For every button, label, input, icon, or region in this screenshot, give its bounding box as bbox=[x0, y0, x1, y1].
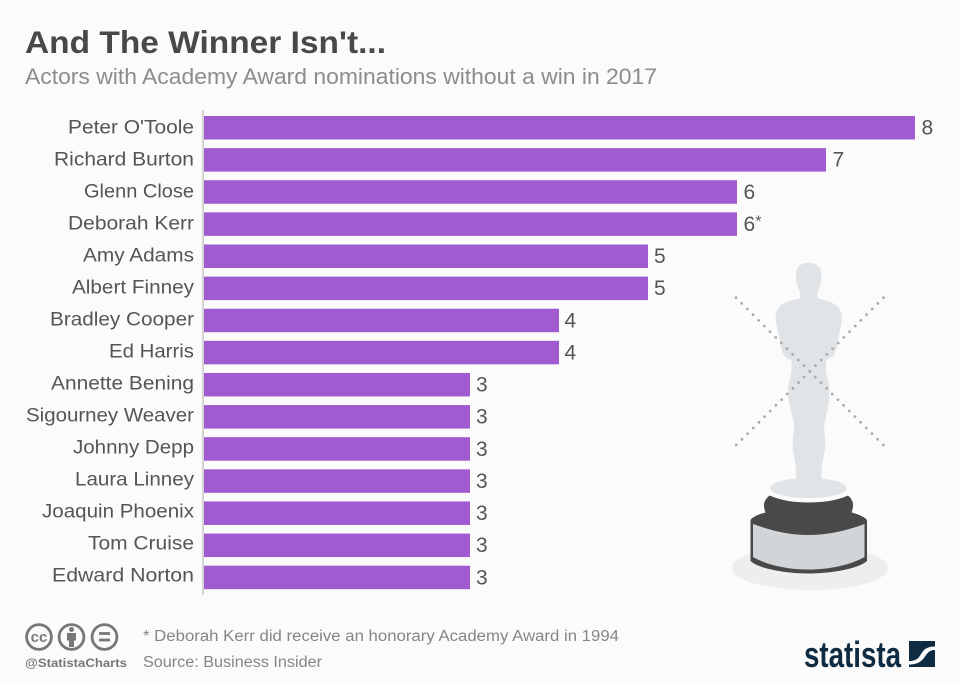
subtitle: Actors with Academy Award nominations without a win in 2017 bbox=[25, 64, 657, 89]
statue figure bbox=[776, 263, 842, 484]
value labels: 3 bbox=[476, 534, 488, 557]
bars bbox=[204, 116, 915, 589]
crossing dots bbox=[736, 298, 884, 445]
shadow bbox=[732, 546, 888, 590]
value labels: 7 bbox=[832, 149, 844, 172]
category labels: Bradley Cooper bbox=[50, 308, 195, 330]
value labels: 5 bbox=[654, 245, 666, 268]
category labels: Richard Burton bbox=[54, 148, 194, 170]
category labels: Glenn Close bbox=[84, 180, 194, 202]
value labels bbox=[476, 117, 933, 589]
license icons bbox=[27, 625, 117, 649]
footnote: * Deborah Kerr did receive an honorary Academy Award in 1994 bbox=[143, 628, 619, 645]
icon: attribution bbox=[59, 625, 84, 649]
category labels: Annette Bening bbox=[51, 372, 194, 394]
value labels: 3 bbox=[476, 406, 488, 429]
category labels: Tom Cruise bbox=[88, 532, 194, 554]
category labels: Joaquin Phoenix bbox=[42, 500, 194, 522]
source: Source: Business Insider bbox=[143, 654, 322, 671]
value labels: 3 bbox=[476, 502, 488, 525]
pedestal panel bbox=[753, 524, 864, 570]
value labels: * bbox=[755, 214, 761, 231]
category labels: Ed Harris bbox=[109, 340, 194, 362]
logo mark bbox=[909, 641, 935, 667]
category labels: Deborah Kerr bbox=[68, 212, 195, 234]
icon: cc: cc bbox=[31, 629, 47, 646]
value labels: 3 bbox=[476, 470, 488, 493]
category labels: Albert Finney bbox=[72, 276, 194, 298]
statista logo bbox=[804, 634, 935, 675]
category labels: Laura Linney bbox=[75, 468, 194, 490]
title: And The Winner Isn't... bbox=[25, 24, 386, 60]
value labels: 8 bbox=[922, 117, 933, 140]
value labels: 6 bbox=[744, 181, 755, 204]
category labels: Johnny Depp bbox=[73, 436, 194, 458]
value labels: 3 bbox=[476, 374, 488, 397]
category labels: Sigourney Weaver bbox=[26, 404, 195, 426]
category labels: Amy Adams bbox=[83, 244, 194, 266]
category labels bbox=[26, 116, 195, 586]
value labels: 3 bbox=[476, 438, 488, 461]
category labels: Peter O'Toole bbox=[68, 116, 194, 138]
value labels: 4 bbox=[564, 341, 576, 364]
illustration: crossed-out Oscar statue bbox=[732, 263, 888, 590]
statue disc bbox=[770, 478, 847, 498]
social handle: @StatistaCharts bbox=[25, 656, 127, 670]
category labels: Edward Norton bbox=[52, 564, 194, 586]
logo wordmark: statista bbox=[804, 634, 902, 675]
icon: no derivatives bbox=[92, 625, 117, 649]
pedestal bbox=[750, 496, 867, 574]
value labels: 4 bbox=[564, 309, 576, 332]
value labels: 6 bbox=[744, 213, 755, 236]
axis line bbox=[202, 110, 204, 595]
value labels: 5 bbox=[654, 277, 666, 300]
value labels: 3 bbox=[476, 566, 488, 589]
bar chart bbox=[26, 110, 933, 595]
